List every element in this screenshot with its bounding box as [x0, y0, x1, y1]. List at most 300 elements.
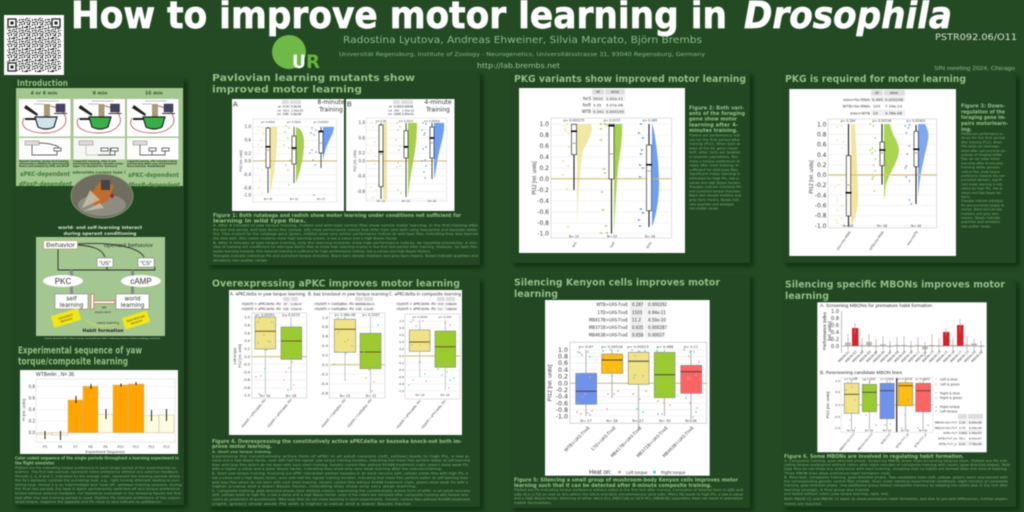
chart: PI12 [rel. units] [809, 160, 815, 194]
chart: elav>WTB [906, 230, 919, 246]
bar chart A: MBON-03 [851, 350, 865, 363]
axis text: 0.4 [539, 154, 549, 161]
box plot B: WTB>TnT_oe [895, 432, 910, 449]
plot C: N= 18 [441, 393, 450, 397]
caption: interaction: world- and self-learning interact [58, 225, 143, 231]
axis labels: 0.8 [29, 384, 35, 389]
table: MB210-G5>TnT [935, 426, 957, 430]
legend: Left & green [940, 382, 960, 386]
heading: experimental sequence [18, 346, 142, 368]
CS box: "CS" [140, 261, 152, 267]
operant conditioning diagram [36, 237, 165, 336]
plot C: 0.6 [399, 333, 404, 337]
plot B: p= 2.08e-06 [335, 313, 355, 317]
bar chart: experiment sequence [20, 370, 178, 454]
axis text: 0.6 [359, 136, 365, 140]
adenylate cyclase label: dependent [87, 176, 111, 180]
bar chart: experiment sequence: Experiment Sequence [85, 449, 125, 454]
plot C: nSyb05 > aPKCdelta -RU [395, 399, 422, 429]
legend: Right torque [661, 470, 686, 475]
self learning [55, 294, 88, 309]
chart: p= 0.00401 [907, 119, 925, 123]
constitutive behavior [51, 308, 81, 328]
legend: Right torque [940, 405, 960, 409]
figure 3 caption: foraging gene im- [961, 115, 1006, 121]
panel: introduction column [14, 78, 184, 505]
axis text: 0.2 [245, 151, 251, 156]
heading [212, 73, 415, 96]
axis text: -0.8 [815, 212, 827, 220]
chart: 0.8 [558, 354, 568, 360]
plot A: 0.6 [244, 331, 250, 335]
bar chart A: MBON-19 [956, 350, 970, 363]
plot B: -0.6 [321, 390, 329, 396]
table: 58.9 [283, 108, 289, 112]
bar chart A: MBON-08 [886, 350, 900, 363]
axis text: 1.0 [359, 120, 365, 125]
bar chart A: MBON-14 [928, 350, 942, 363]
rotated labels: MB371B>UAS-TnxE [635, 425, 670, 459]
figure 4 caption: value and a high Bayes Factor, even with half the regular yaw torque training duration, indicating that these flies perform better at self-learning [212, 458, 470, 463]
axis text: -1.0 [243, 192, 251, 198]
adenylate cyclase label: adenylate cyclase type I [72, 170, 126, 174]
text: sequence caption: ished torque, negative the opposite and PIs close to zero indicate no preference. [15, 499, 162, 504]
axis: 1.0 [835, 379, 840, 383]
table [843, 90, 905, 116]
plot B [320, 313, 385, 428]
text: sequence caption: Periods 3, 4, 6 and 7, indicated by the orange color, represent the training periods where [15, 473, 181, 478]
axis: -1.0 [834, 426, 840, 430]
figure 6 caption: learning (orange). A final group was trained [784, 488, 869, 492]
axis text: 1.0 [539, 121, 549, 128]
tables: 1.93e-13 [364, 303, 375, 306]
bar chart: experiment sequence: P5 [43, 445, 47, 449]
heading: PKG variants show improved motor learning [514, 74, 746, 85]
logo: UR [272, 35, 320, 73]
figure 3 caption: after training (PI12). When [961, 140, 1002, 144]
chart: 0.0 [558, 380, 568, 388]
intro small captions: becomes habitual [127, 165, 165, 168]
bar chart A: MBON-15 [935, 350, 949, 363]
axis text [243, 124, 251, 198]
bar chart A: 1.0 [831, 309, 839, 315]
figure 2 caption: ces for the first period after [689, 137, 740, 142]
dependency labels: dFoxP-dependent [19, 181, 73, 188]
tables: 1.1e-08 [364, 308, 374, 311]
table: 0.15 [283, 104, 289, 108]
chart: 0.6 [558, 360, 568, 367]
chart: p= 0.11 [684, 345, 698, 349]
constitutive behavior: Consistent [58, 312, 74, 321]
chart B: 4-minute training: N= 22 [377, 199, 385, 203]
box plot B: p= 0.00228 [898, 377, 913, 381]
axis text: -0.4 [357, 174, 365, 178]
figure 2 caption: leles of the for gene (rover: [689, 145, 739, 150]
legend: Right & blue [940, 392, 960, 396]
figure 5 caption: α/βs KCs (17D) as well as KCs within the dACA and lACA simultaneously (and α/βs; MB417B) leads to high PIs, a low p-value [514, 492, 743, 496]
chart: -0.6 [556, 400, 568, 408]
heading: experimental sequence: torque/composite learning [18, 356, 128, 368]
table: 1.56 [959, 420, 965, 424]
connections [58, 244, 155, 270]
table: MB371B>UAS-TnxE [589, 325, 628, 330]
chart: N= 35 [659, 419, 671, 423]
table: 8.09e-08 [969, 426, 982, 430]
intro small captions: Operant learning: during short training, [19, 160, 69, 163]
table: 6.93 [959, 442, 965, 446]
table: 1.45e-07 [969, 431, 982, 435]
chart: -1.0 [556, 414, 568, 420]
plot B: 0.0 [322, 362, 329, 367]
chart: elav>for-RNAi [836, 230, 852, 251]
axis text: 0.0 [539, 176, 549, 183]
text: sequence caption [15, 456, 183, 504]
figure 3 caption: PIs and punished torque di- [961, 203, 1006, 207]
axis text: 0.2 [817, 162, 827, 169]
figure 4 caption: (right, green) show weak PIs with a higher p-value and a lower Bayes Factor. [212, 501, 412, 506]
table: forS [583, 96, 591, 101]
figure 2 caption: training (PI12). When both al- [689, 141, 742, 146]
plot C: N= 18 [416, 393, 425, 397]
table [277, 100, 303, 116]
chart group [817, 302, 987, 452]
box plot B: N= 28 [919, 428, 927, 432]
table: MB463B>UAS-TnxE [589, 332, 628, 338]
text: sequence caption: Color coded sequence of the single periods throughout a learning experiment in [15, 456, 179, 462]
chart: N= 27 [580, 419, 592, 423]
points [258, 127, 264, 193]
bar chart A: A. Screening MBONs for premature habit formation [820, 303, 933, 308]
figure 6 caption: type flies do not show any preference with each training, revealing that no habits are formed after this kind of training. [784, 467, 1008, 471]
box plot B: p= 0.00067 [916, 377, 931, 381]
bar chart A: MBON-07 [879, 350, 893, 363]
figure 3 caption: values and high Bayes fac- [961, 191, 1003, 195]
legend: Left torque [626, 470, 648, 475]
chart: PI12 [rel. units] [548, 364, 554, 401]
chart: N= 27 [632, 419, 644, 423]
world learning [116, 294, 149, 309]
chart: p= 0.00156 [873, 119, 891, 123]
bar chart: experiment sequence: P8 [89, 445, 92, 449]
rotated labels: 17D>UAS-TnxE [590, 425, 618, 453]
panel: PKG variants [511, 72, 750, 263]
axis text: -1.0 [537, 230, 549, 238]
axis: 0.0 [835, 403, 840, 407]
figure 6 caption: ments are required. [784, 502, 822, 506]
figure 2 caption: grey bars means. Boxes indi- [689, 197, 741, 202]
plot A: 1.0 [244, 316, 250, 320]
tables: nSyb05 > aPKCdelta -RU [396, 302, 437, 306]
chart A: 8-minute training [232, 99, 345, 211]
tables [241, 297, 457, 311]
mere training arrow: mere training [97, 321, 119, 325]
plot A: PI12 [rel. units] [238, 344, 242, 368]
timing labels: 4 or 8 min [31, 90, 57, 96]
axis text: -0.2 [815, 182, 827, 189]
figure 3 caption: medians and grey bars [961, 212, 999, 216]
figure 3 caption: rection. Black bars denote [961, 208, 1002, 212]
box plot B: MB093-G2>TnT [838, 432, 856, 452]
figure 3 caption: quartiles and whiskers [961, 220, 1000, 224]
bar chart A: 0.4 [831, 330, 839, 336]
plot B: nSyb05 > CadSgBaz -RU [346, 398, 373, 428]
panel: PKG required [783, 73, 1016, 263]
plot C: 1.0 [399, 319, 404, 323]
axis [834, 379, 840, 430]
chart A: 8-minute training: p= 0.0003 [287, 120, 301, 124]
table: rsh [388, 112, 392, 116]
figure 3 caption: training while genetic [961, 166, 1000, 170]
figure 3 caption: PKG levels are downregu- [961, 145, 1001, 149]
figure 6 caption: Three MBON lines show premature habit formation (red). [783, 472, 891, 476]
tables: 3.32e-08 [291, 308, 302, 311]
violins [383, 123, 387, 199]
table: 4.78 [959, 426, 965, 430]
table: 5.07e-08 [606, 102, 624, 108]
bar chart A: 0.2 [831, 337, 839, 343]
plot A: p= 0.0219 [282, 313, 300, 317]
table [935, 414, 983, 446]
text: sequence caption: quence. The first two periods represent naive preference without any external feedback. [15, 469, 179, 474]
points [834, 125, 844, 226]
figure 4 caption: C. Composite training, goal-directed phase (test without colors). Expressing the constitutively active form of aPKC in all adult neurons [212, 488, 470, 493]
circuit diagrams [19, 138, 178, 160]
whiskers and boxes [268, 127, 321, 193]
figure 2 caption: and punished torque direction. [689, 188, 741, 193]
box plot B: p= 0.0008 [880, 377, 894, 381]
axis text: -0.6 [815, 202, 827, 210]
axis text: -0.4 [815, 192, 827, 200]
figure 4 caption: A. Short yaw torque training. [212, 449, 272, 454]
figure 3 caption: tors. [961, 195, 971, 199]
figure 5 caption: Figure 5: Silencing a small group of mushroom-body Kenyon cells improves motor [514, 478, 738, 484]
bar chart: experiment sequence: P11 [133, 445, 139, 449]
rotated labels [563, 425, 696, 459]
tables: 27.6 [438, 303, 444, 306]
heading: experimental sequence: Experimental sequence of yaw [18, 346, 142, 356]
figure 3 caption: dices for the first period [961, 136, 1005, 140]
heading: improved motor learning [212, 84, 362, 96]
table: 283 [394, 108, 399, 112]
chart: 0.4 [558, 367, 568, 374]
chart: p= 0.000275 [564, 118, 584, 122]
heading: Pavlovian learning mutants show [212, 73, 415, 84]
figure 6 caption: the corresponding genetic control flies (middle, blue) under identical experimental conditions: eight minutes of composite [784, 480, 1009, 484]
plot C: p= 0.0029 [413, 315, 428, 319]
bar chart A: MBON-17 [949, 350, 963, 363]
panel: overexpressing aPKC [208, 278, 480, 507]
figure 1 caption: Triangles indicate individual PIs and punished torque direction. Black bars denote medians and grey bars means. Boxes indicate quartiles and [212, 253, 479, 258]
axis text: -0.4 [537, 198, 549, 205]
figure 3 caption: Triangles indicate individual [960, 199, 1003, 203]
bars [37, 384, 174, 435]
axis labels: 0.4 [29, 407, 35, 412]
table: rut [277, 108, 281, 112]
bar chart A: MBON-06 [872, 350, 886, 363]
box plot B: p= 0.0284 [844, 377, 858, 381]
rotated labels: MB417B>UAS-TnxE [609, 425, 644, 459]
photo: fly [71, 174, 133, 218]
box plot B: PI12 [rel. units] [825, 392, 830, 418]
box plot B [820, 370, 983, 452]
intro small captions: self-learning is inhibited by world-learning [19, 162, 69, 166]
rotated labels: WTB>UAS-TnxE [563, 425, 592, 453]
chart A: 8-minute training: Training [318, 106, 343, 114]
figure 2 caption: Plotted are performance indi- [689, 132, 742, 138]
chart B: 4-minute training: p= 0.00016 [424, 119, 440, 123]
bar chart A: MBON-20 [963, 350, 977, 363]
plot C: 0.8 [399, 326, 404, 330]
table: 0.000208 [885, 97, 904, 102]
figure 4 caption: (left, yellow) leads to high PIs, a low p-value and a high Bayes Factor, even if the colors are removed after composite training with torque and [212, 492, 468, 497]
axis text: 0.2 [359, 150, 365, 156]
bar chart: experiment sequence: PI [rel. units] [21, 399, 26, 421]
whiskers and boxes [381, 123, 432, 199]
plot C: -0.6 [398, 375, 404, 379]
PKC: PKC [55, 277, 71, 286]
bar chart A: MBON-10 [900, 350, 914, 363]
plot A: p= 0.00091 [255, 313, 275, 317]
table: 0.561 [394, 104, 402, 108]
axis text [537, 121, 549, 238]
axis text: -0.2 [537, 187, 549, 194]
plot C: p= 0.102 [438, 315, 452, 319]
chart: WTB>for-RNAi [868, 230, 885, 251]
goal-directed behavior: behavior [130, 318, 144, 326]
self learning: self [66, 296, 78, 302]
axis text: 0.6 [245, 138, 251, 142]
dependency labels: aPKC-dependent [128, 172, 179, 179]
plot B: N= 31 [366, 394, 376, 398]
text: sequence caption: ishing heat. Period 5 is an intermediate test 'heat off', between training sessions. During [15, 482, 183, 487]
plot A [233, 313, 307, 428]
chart: N= 18 [645, 234, 655, 238]
figure 3 caption [960, 104, 1008, 228]
table [582, 89, 625, 114]
whiskers and boxes [574, 124, 649, 234]
figure 6 caption: Both MBON 02 and MBON 13 seem to show premature habit formation, but due to pre-test differences, further experi- [784, 497, 1009, 501]
figure 3 caption: means. Boxes indicate [961, 216, 1000, 220]
box plot B: MB210-G5>TnT [856, 432, 874, 452]
chart B: 4-minute training: 4-minute [424, 99, 452, 106]
MB dependent [95, 306, 112, 314]
table: 7.78e-08 [969, 442, 982, 446]
figure 6 caption: B. Rescreen, composite training, goal-directed phase. Two candidate lines (left, yellow, green) were rescreened with [784, 476, 1008, 480]
figure 2 caption: in separate populations, flies [689, 154, 738, 159]
table: rsh [277, 112, 281, 116]
figure 3 caption: learning after 8-minutes [961, 161, 1003, 165]
axis: -0.5 [834, 415, 840, 419]
figure 1 caption: A. After 8 minutes of yaw torque training, mutant and wild type control flies show normal motor learning. In the first training after [213, 222, 478, 228]
plot A: -1.0 [243, 394, 250, 398]
intro green panel [16, 88, 183, 189]
table: rut [388, 108, 392, 112]
table [388, 100, 414, 116]
operant label: operant behavior [104, 243, 153, 249]
chart: -0.8 [556, 407, 568, 414]
axis text: 0.6 [817, 142, 827, 148]
heading [785, 280, 1005, 302]
figure 2 caption: ants of the foraging [689, 111, 745, 117]
adenylate cyclase label [72, 170, 126, 180]
plot A: 0.4 [244, 339, 251, 343]
bar chart A: MBON-01 [837, 350, 851, 363]
chart A: 8-minute training: PI12 [rel. units] [239, 150, 243, 172]
axis text: 1.0 [245, 124, 251, 129]
violins [270, 127, 277, 194]
plot C: -0.2 [398, 361, 404, 365]
chart: N= 18 [911, 224, 921, 228]
plot A: N= 30 [260, 394, 270, 398]
axis labels [29, 384, 35, 435]
table: 198 [283, 112, 288, 116]
poster number: PSTR092.06/O11 [935, 33, 1017, 43]
tables: 7.66e-08 [446, 308, 457, 311]
plot A: 0.8 [244, 324, 250, 328]
MB dependent: dependent [95, 310, 112, 314]
table: 0.802 [959, 431, 967, 435]
figure 1 caption: whiskers non-outlier range. [213, 257, 268, 262]
figure 3 caption: preference towards the non [961, 174, 1005, 178]
figure 3 caption: cated by high PIs, low p- [961, 187, 1004, 191]
figure 3 caption: lated after panneuronal ex- [961, 149, 1007, 153]
bar chart A: MBON-09 [893, 350, 907, 363]
table: 5910 [593, 96, 603, 101]
apparatus illustrations [19, 99, 178, 136]
authors: Radostina Lyutova, Andreas Ehweiner, Silvia Marcato, Björn Brembs [343, 35, 702, 46]
table: 0.000155 [606, 109, 625, 114]
world learning: world [125, 296, 141, 302]
goal-directed behavior: Goal-directed [126, 314, 145, 323]
chart: p= 0.485 [643, 118, 657, 122]
figure 6 caption: cating torque preference without colors after eight minutes of composite training with colors (goal-directed phase). Wild [784, 463, 1010, 467]
table: WTB [582, 109, 591, 114]
figure 4 caption: B. Short yaw torque training. Knocking out aPKC interaction partner bazooka in all adult neurons (left, yellow) yields flies with high PIs, a [212, 470, 469, 476]
plot A: -0.8 [243, 386, 250, 390]
chart: WTB [645, 241, 653, 249]
figure 5 caption: learning such that it can be detected after 8-minute composite training. [514, 483, 712, 489]
meeting: SfN meeting 2024, Chicago [934, 66, 1015, 72]
figure 1 caption: B. After 4 minutes of yaw torque training, only the learning mutants show high performance indices. As reported previously, 4 min- [213, 240, 479, 245]
figure 1 caption: utes of training are insufficient for wild type Berlin flies to show high learning scores in the first test period after training. However, for both Pav- [213, 244, 479, 249]
tables: nSyb05 > aPKCdelta -RU [396, 307, 437, 311]
dependency labels: aPKC-dependent [20, 171, 70, 178]
timing labels [31, 90, 163, 96]
self learning: learning [60, 303, 84, 309]
table: 7.34e-10 [885, 104, 903, 108]
figure 3 caption: regulation of the [961, 110, 1005, 116]
axis: 0.6 [835, 390, 840, 394]
chart group: A. aPKCdelta in yaw torque learning [230, 292, 305, 298]
logo: UR: U [292, 51, 306, 73]
axis text: 1.0 [817, 122, 827, 128]
figure 2 caption: values and high Bayes Factors. [689, 180, 741, 185]
heading: Silencing specific MBONs improves motor [785, 280, 1005, 290]
figure 2 caption: learning after 4- [689, 122, 738, 128]
chart A: 8-minute training: p= 0.0002 [261, 120, 275, 124]
table: 0.658 [632, 332, 644, 338]
chart B: 4-minute training: B [347, 102, 352, 108]
figure 3 caption: pression of foraging dsRNA [961, 153, 1003, 157]
box plot B: p= 0.0005 [862, 377, 876, 381]
table: elav>WTB [850, 110, 870, 116]
table: 1.9e-09 [291, 112, 302, 116]
axis text [815, 122, 827, 230]
axis text: 0.0 [817, 172, 827, 179]
chart: 1.0 [558, 347, 568, 354]
plot C: -0.4 [398, 368, 404, 372]
chart A: 8-minute training: N= 22 [290, 197, 298, 201]
